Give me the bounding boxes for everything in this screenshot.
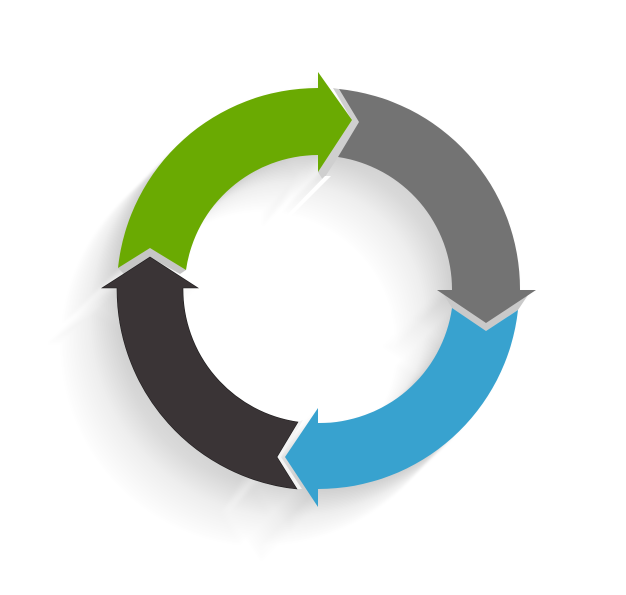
arrow: grey [338, 89, 536, 323]
arrow: blue [285, 308, 518, 507]
highlight streak beside green arrow [284, 176, 331, 218]
bevel: blue to dark joint [277, 420, 303, 489]
bevel: green to grey joint [318, 88, 359, 180]
bevel: grey to blue joint [444, 295, 528, 331]
bevel: dark to green joint [118, 248, 186, 274]
arrow: dark [102, 257, 298, 489]
long diagonal drop shadow [46, 72, 536, 563]
arrow: green [118, 72, 352, 270]
